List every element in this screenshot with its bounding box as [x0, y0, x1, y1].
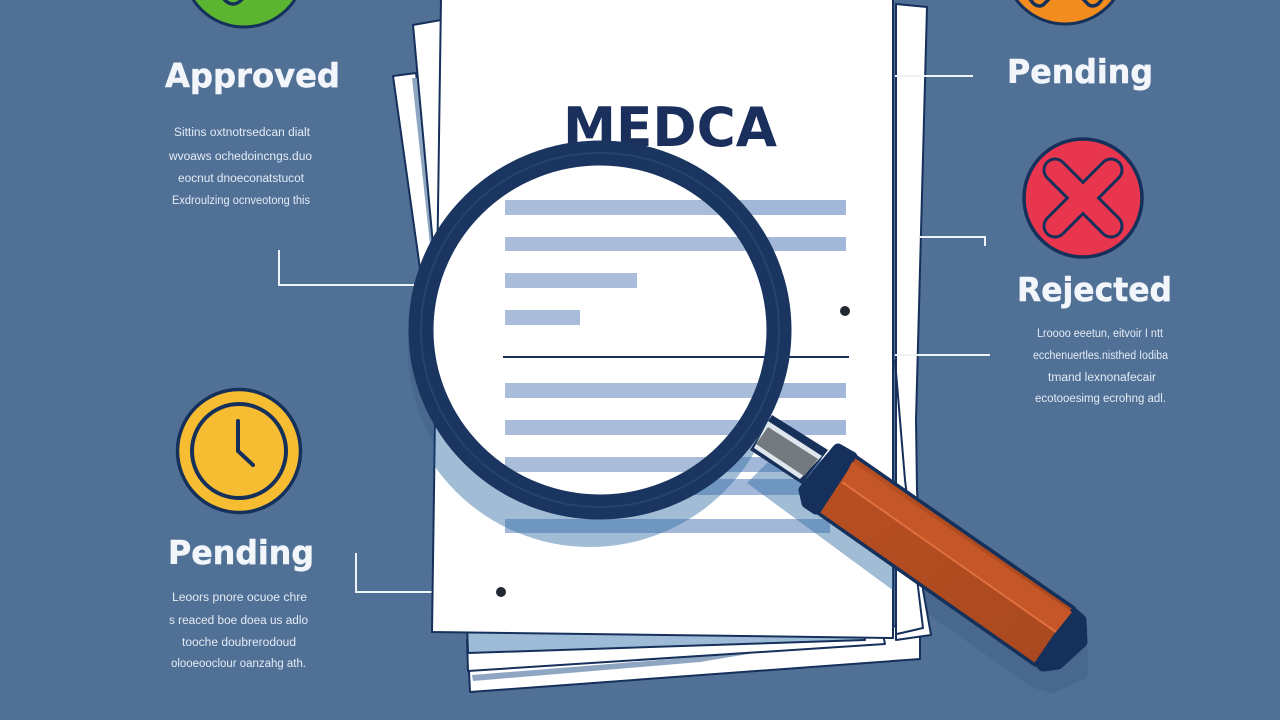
- shadow on page: [434, 416, 893, 590]
- heading: Rejected: Rejected: [1017, 270, 1172, 309]
- handle end cap bottom: [1038, 612, 1082, 666]
- document title: MEDCA: [563, 96, 777, 159]
- heading: Pending: Pending: [1007, 52, 1153, 91]
- icon: green check circle: [183, 0, 305, 27]
- sheet: bottom stack middle: [467, 620, 885, 671]
- handle wooden grip: [818, 456, 1074, 665]
- text block: rejected description: Lroooo eeetun, eitvoir I ntt: [1037, 328, 1164, 340]
- magnifier handle: [804, 449, 1082, 666]
- text block: approved description: Sittins oxtnotrsedcan dialt: [174, 127, 311, 139]
- back sheets of paper stack: [393, 4, 931, 692]
- text block: approved description: [168, 127, 312, 207]
- background shadows of lens and handle: [408, 168, 1080, 685]
- heading: Approved: Approved: [165, 56, 340, 95]
- text block: pending description: s reaced boe doea us adlo: [169, 615, 308, 627]
- text block: rejected description: [1033, 328, 1169, 405]
- divider line: [503, 356, 849, 358]
- heading: Pending: Pending: [168, 533, 314, 572]
- sheet: left second: [413, 20, 450, 300]
- text block: rejected description: ecchenuertles.nisthed Iodiba: [1033, 350, 1169, 362]
- text block: pending description: tooche doubrerodoud: [182, 637, 296, 649]
- text block: rejected description: ecotooesimg ecrohng adl.: [1035, 393, 1166, 405]
- status: approved (top left): [165, 0, 340, 207]
- sheet: far left: [393, 73, 450, 340]
- text block: approved description: wvoaws ochedoincngs.duo: [168, 151, 312, 163]
- icon: yellow clock: [178, 390, 300, 512]
- icon: red cross circle: [1024, 139, 1142, 257]
- main document page: [432, 0, 893, 638]
- sheet: bottom stack lowest: [468, 625, 920, 692]
- sheet: bottom stack top: [467, 620, 865, 653]
- handle bright band: [842, 462, 1072, 632]
- status: pending (top right): [1004, 0, 1153, 91]
- sheet: left shadow strip: [412, 78, 450, 300]
- bullet dot right: [840, 306, 850, 316]
- text block: rejected description: tmand lexnonafecair: [1048, 372, 1156, 384]
- text block: approved description: Exdroulzing ocnveotong this: [172, 195, 310, 207]
- text block: pending description: [169, 592, 308, 670]
- magnifier metal shaft: [750, 415, 828, 484]
- status: pending (bottom left): [168, 390, 314, 670]
- handle highlight: [842, 482, 1056, 632]
- bullet dot left: [496, 587, 506, 597]
- icon: orange circle: [1004, 0, 1126, 24]
- sheet: right inner edge: [895, 360, 923, 634]
- text block: pending description: olooeooclour oanzahg ath.: [171, 658, 306, 670]
- sheet: far right: [896, 4, 931, 640]
- handle end cap top: [804, 449, 852, 509]
- text block: approved description: eocnut dnoeconatstucot: [178, 173, 305, 185]
- status: rejected: [1017, 139, 1172, 405]
- infographic: medical document under review: [164, 0, 1170, 693]
- sheet: lowest shadow strip: [472, 652, 760, 681]
- magnifier ring: [421, 153, 779, 507]
- connector lines: [279, 76, 990, 592]
- lens with magnified text bars: [434, 167, 766, 494]
- document text bars: [505, 200, 846, 533]
- text block: pending description: Leoors pnore ocuoe chre: [172, 592, 307, 604]
